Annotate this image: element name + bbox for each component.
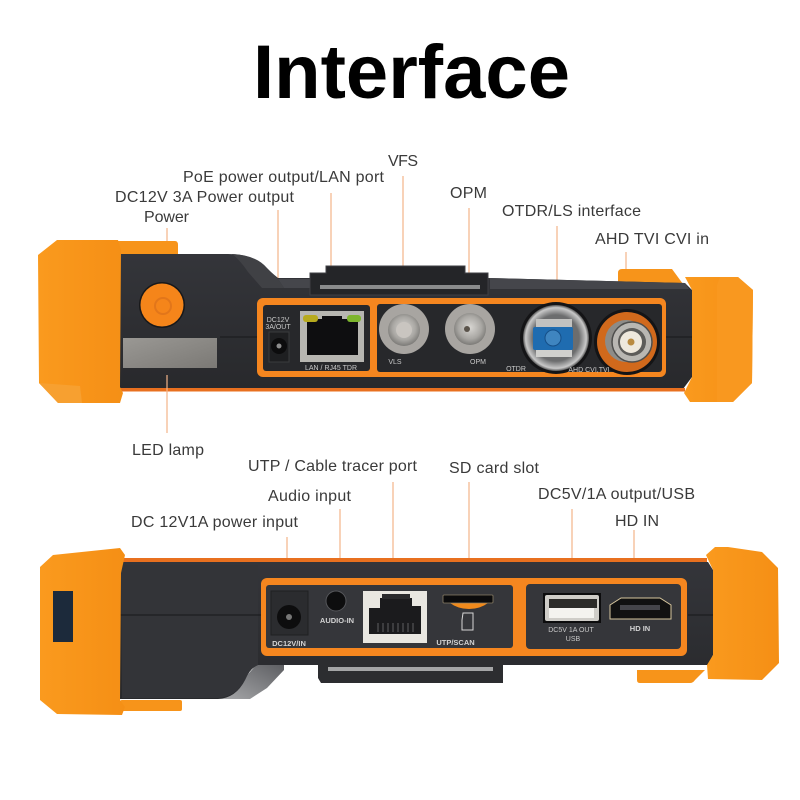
SD card slot: UTP/SCAN (436, 638, 475, 647)
HDMI port (610, 598, 671, 633)
left bumper (38, 240, 123, 403)
callout: HD IN (615, 513, 659, 574)
USB port: USB (566, 636, 581, 643)
device body (116, 254, 692, 389)
callout: Power: Power (144, 209, 190, 226)
device: bottom view (40, 547, 779, 715)
callout: OTDR/LS interface: OTDR/LS interface (502, 203, 641, 220)
OPM connector (445, 304, 495, 366)
port panel right (377, 304, 662, 372)
RJ45 cable tracer port (363, 591, 427, 643)
RJ45 LAN port (300, 311, 364, 372)
orange port frame (257, 298, 666, 377)
callout: OPM (450, 185, 487, 296)
lower rail (318, 660, 503, 683)
port panel left (263, 305, 370, 371)
LED lamp (123, 338, 217, 368)
VLS connector: VLS (388, 359, 402, 366)
side slot (53, 591, 73, 642)
grey grip (218, 664, 284, 699)
OTDR connector (506, 302, 592, 374)
callout: UTP / Cable tracer port: UTP / Cable tracer port (248, 458, 418, 475)
orange top edge (122, 558, 707, 562)
audio jack (320, 591, 354, 625)
callout: DC 12V1A power input: DC 12V1A power input (131, 514, 299, 531)
orange bottom edge (120, 388, 685, 392)
USB port (543, 593, 601, 643)
callout: Audio input (268, 488, 352, 574)
callout: VFS: VFS (388, 153, 418, 170)
rear orange tabs (120, 670, 705, 711)
DC input jack (271, 591, 308, 648)
callout: DC5V/1A output/USB: DC5V/1A output/USB (538, 486, 695, 503)
SD card slot (436, 595, 493, 647)
callout: LED lamp (132, 375, 204, 459)
audio jack: AUDIO-IN (320, 616, 354, 625)
OTDR connector: OTDR (506, 366, 526, 373)
BNC connector (568, 309, 660, 375)
HDMI port: HD IN (630, 624, 650, 633)
callout: LED lamp: LED lamp (132, 442, 204, 459)
DC output jack (265, 317, 291, 362)
power button (139, 282, 185, 328)
left bumper (40, 548, 125, 715)
USB port: DC5V 1A OUT (548, 627, 594, 634)
callout: PoE power output/LAN port: PoE power output/LAN port (183, 169, 385, 186)
device: top view (38, 240, 753, 403)
device body (120, 562, 713, 699)
right bumper (706, 547, 779, 680)
callout: OPM: OPM (450, 185, 487, 202)
title: Interface (253, 30, 570, 115)
callout: SD card slot (449, 460, 540, 574)
callout: HD IN: HD IN (615, 513, 659, 530)
BNC connector: AHD CVI,TVI (568, 367, 610, 374)
VLS connector (379, 304, 429, 366)
callout: Audio input: Audio input (268, 488, 352, 505)
orange port frame (261, 578, 687, 656)
right bumper (684, 277, 753, 402)
OPM connector: OPM (470, 359, 486, 366)
callout: OTDR/LS interface (502, 203, 641, 298)
callout: Power (144, 209, 190, 276)
rear orange tabs (116, 241, 683, 284)
callout: AHD TVI CVI in: AHD TVI CVI in (595, 231, 709, 248)
DC input jack: DC12V/IN (272, 639, 306, 648)
RJ45 LAN port: LAN / RJ45 TDR (305, 365, 357, 372)
callout: SD card slot: SD card slot (449, 460, 540, 477)
DC output jack: DC12V (267, 317, 290, 324)
port panel right (526, 584, 681, 649)
callout: DC12V 3A Power output: DC12V 3A Power output (115, 189, 295, 206)
callout: AHD TVI CVI in (595, 231, 709, 298)
DC output jack: 3A/OUT (265, 324, 291, 331)
port panel left (266, 585, 513, 648)
